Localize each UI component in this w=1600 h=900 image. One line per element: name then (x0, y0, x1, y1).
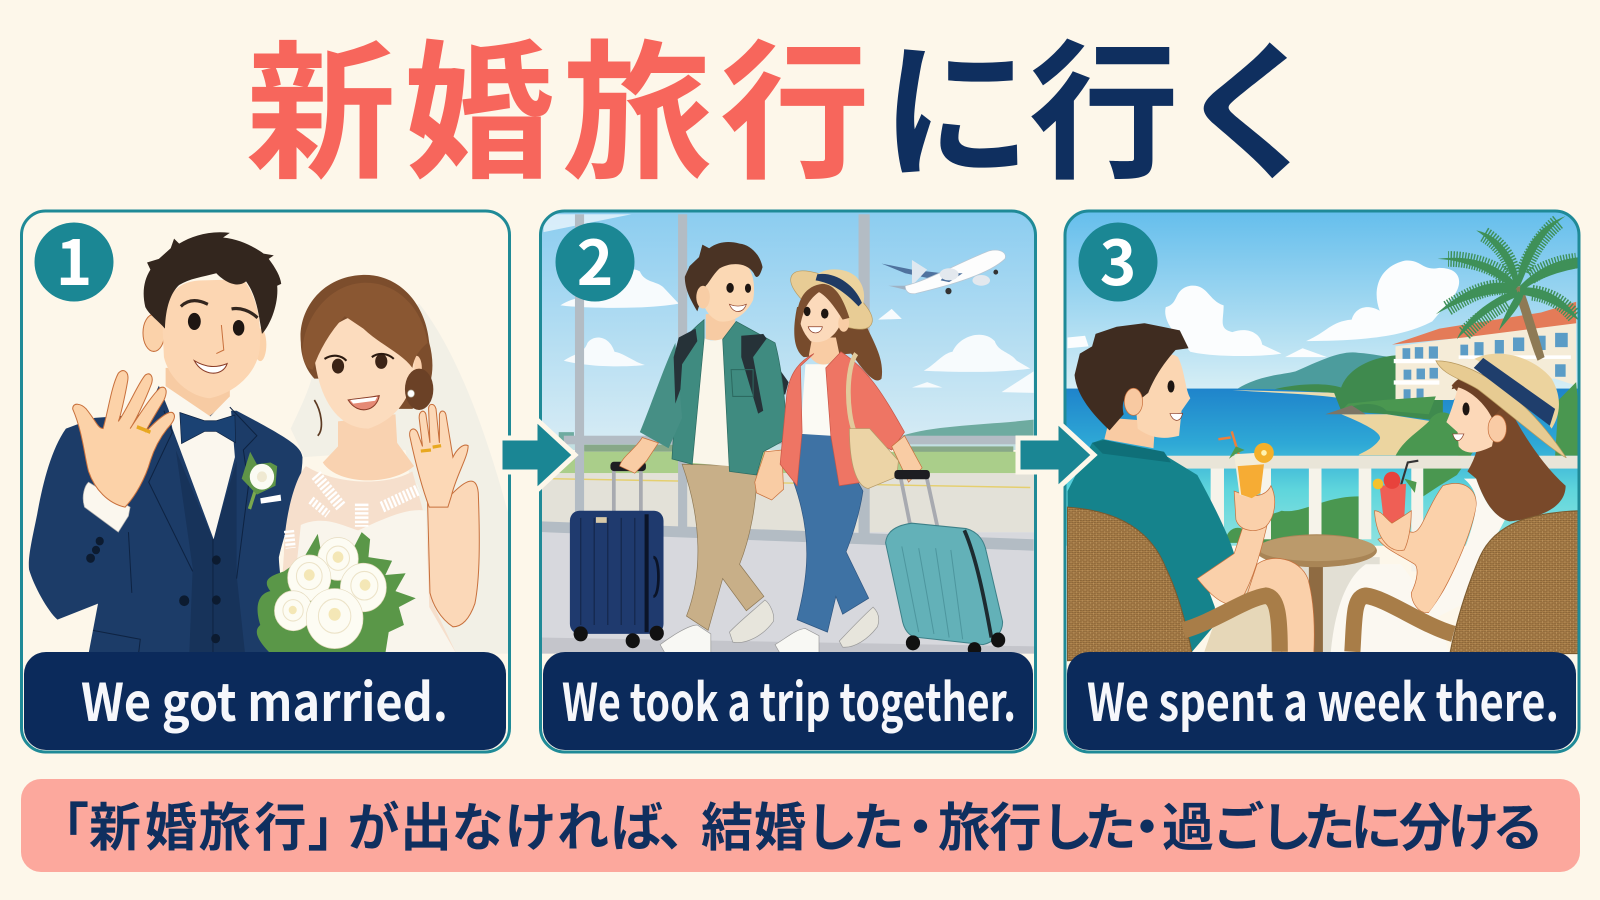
woman hand (1374, 511, 1411, 551)
lace (284, 472, 422, 549)
wheels (574, 626, 664, 648)
man neck (706, 311, 736, 343)
caption bar 2 (543, 652, 1033, 750)
arrow 2 (1018, 420, 1094, 490)
groom cuff (83, 482, 130, 532)
hotel (1392, 302, 1576, 400)
backpack edge (778, 368, 789, 395)
step badge 1 (34, 213, 114, 303)
groom nose and mouth (216, 325, 224, 354)
woman ear (838, 315, 849, 332)
step badge 2: 2 (577, 213, 613, 303)
bride face (314, 314, 415, 429)
woman hair (1452, 375, 1566, 521)
clouds (1068, 261, 1459, 357)
groom eyes (181, 301, 258, 336)
roses (274, 537, 386, 649)
lapels (93, 407, 257, 654)
trees line (584, 445, 685, 452)
bride hair wisp (314, 400, 321, 436)
man ear (696, 286, 710, 309)
groom vest (176, 450, 245, 654)
bride fringe (303, 283, 428, 370)
woman chair (1352, 511, 1580, 654)
man chair back (1068, 507, 1192, 661)
bushes behind railing (1225, 496, 1359, 543)
groom jacket (29, 386, 303, 654)
tip text: 「新婚旅行」が出なければ、結婚した・旅行した・過ごしたに分ける (37, 786, 1544, 861)
rose petals (283, 546, 378, 633)
woman arm (892, 436, 922, 482)
buttons (86, 537, 221, 643)
bride dress (277, 466, 456, 654)
shell (570, 511, 664, 634)
groom neck (166, 368, 230, 416)
man hair (685, 242, 763, 311)
step badge 3: 3 (1100, 213, 1136, 303)
groom ring (137, 427, 150, 432)
woman cardigan (780, 352, 905, 486)
man eyes and mouth (726, 283, 734, 293)
caption text 1: We got married. (81, 661, 448, 736)
bottom tip bar (21, 779, 1580, 872)
pocket square (260, 495, 281, 504)
orange drink (1218, 431, 1274, 498)
step badge 1: 1 (56, 213, 92, 303)
tarmac (537, 473, 1044, 532)
rocks (1325, 405, 1366, 414)
man neck (1104, 418, 1155, 448)
illustration: resort balcony (1061, 207, 1587, 661)
panel 1 border (22, 211, 510, 752)
earring (408, 390, 414, 397)
man left hand (620, 437, 658, 473)
woman neck (809, 337, 839, 365)
window frames (542, 214, 1034, 551)
woman shoes (775, 629, 819, 654)
hotel balconies (1394, 355, 1571, 385)
floor (1274, 557, 1380, 654)
caption text 2: We took a trip together. (562, 661, 1016, 736)
far shore (1232, 390, 1341, 398)
man shoes (660, 625, 711, 654)
man ear (1124, 388, 1143, 415)
veil (291, 304, 510, 654)
man arm (1197, 523, 1267, 604)
illustration: wedding couple (29, 232, 510, 654)
woman chair arm (1352, 596, 1453, 652)
bride eyes (324, 354, 394, 374)
step badge 2 (556, 213, 634, 303)
sky (537, 207, 1044, 439)
hotel roof (1392, 302, 1576, 345)
shoulder bag (848, 354, 898, 489)
man shirt (1068, 439, 1234, 652)
woman eyes and mouth (804, 307, 811, 316)
boutonniere (242, 452, 277, 509)
groom hair (144, 232, 281, 334)
woman fringe (797, 284, 849, 325)
arrow 1 (500, 418, 575, 492)
caption bar 3 (1067, 652, 1576, 750)
navy suitcase (570, 462, 664, 648)
distant hills (902, 420, 1034, 443)
sea (1061, 389, 1587, 546)
bride hair back (301, 275, 432, 409)
man tshirt (687, 336, 729, 466)
palm frond combs (1446, 221, 1576, 334)
groom hand (73, 371, 174, 507)
woman face (799, 286, 842, 342)
man trousers (682, 464, 764, 630)
bow tie (180, 412, 236, 444)
man hand (1234, 486, 1275, 530)
man chair (1068, 507, 1280, 661)
rose centres (289, 551, 370, 621)
woman top (1429, 479, 1506, 618)
far hills (1238, 352, 1397, 391)
groom ears (143, 314, 165, 351)
man eye and mouth (1168, 380, 1175, 392)
terminal floor (537, 532, 1044, 654)
airplane (882, 250, 1005, 294)
teal suitcase (886, 470, 1005, 656)
bride neck and chest (323, 414, 414, 480)
panel 2: airport (537, 207, 1044, 752)
bride mouth (348, 396, 379, 410)
man leg (1246, 558, 1314, 654)
woman fringe (1452, 374, 1502, 418)
bride bun (405, 369, 433, 410)
panel 3: resort (1061, 207, 1587, 752)
step badge 3 (1078, 213, 1158, 303)
man face (702, 262, 754, 322)
hotel windows (1403, 333, 1568, 400)
clouds (544, 214, 1034, 393)
handle (614, 466, 641, 514)
near foliage (1341, 382, 1583, 456)
bouquet greenery (257, 532, 416, 654)
groom face (162, 279, 260, 398)
bride arm (428, 481, 479, 627)
beach (1341, 414, 1432, 455)
caption bar 1 (24, 652, 506, 750)
woman chair back (1450, 511, 1580, 654)
palm fronds (1436, 216, 1580, 339)
palm (1436, 216, 1580, 361)
title (246, 0, 1325, 210)
woman dress skirt (1331, 564, 1450, 654)
distant water (537, 443, 1044, 450)
bride hand (410, 404, 468, 507)
bodice (287, 510, 456, 654)
woman hair back (794, 293, 882, 380)
man left sleeve (640, 343, 682, 448)
railing posts (1211, 468, 1423, 571)
bride rings (421, 446, 441, 451)
woman eye and mouth (1463, 402, 1470, 415)
table (1256, 534, 1377, 654)
woman top (800, 364, 831, 436)
man face (1134, 355, 1190, 438)
woman face (1446, 385, 1495, 452)
woman arm (1378, 483, 1476, 613)
woman jeans (794, 434, 869, 632)
red drink (1373, 461, 1418, 524)
man chair arm (1183, 596, 1280, 652)
man jacket (672, 320, 786, 475)
man pocket (731, 370, 753, 396)
panel 1: wedding (21, 211, 510, 753)
bride ear (414, 356, 422, 370)
sky (1061, 207, 1587, 389)
straw hat (783, 260, 880, 340)
railing top (1061, 456, 1587, 469)
illustration: airport departure (537, 207, 1044, 656)
backpack straps (674, 329, 767, 414)
man right hand (755, 450, 784, 500)
man shorts (1204, 564, 1282, 652)
bouquet (257, 532, 416, 654)
man hair (1075, 323, 1189, 430)
big straw hat (1436, 354, 1566, 458)
panel 3 border (1065, 211, 1579, 752)
foliage on hill (1274, 355, 1443, 421)
groom shirt (164, 385, 235, 539)
panel 2 border (540, 211, 1036, 752)
grass (537, 452, 1044, 473)
